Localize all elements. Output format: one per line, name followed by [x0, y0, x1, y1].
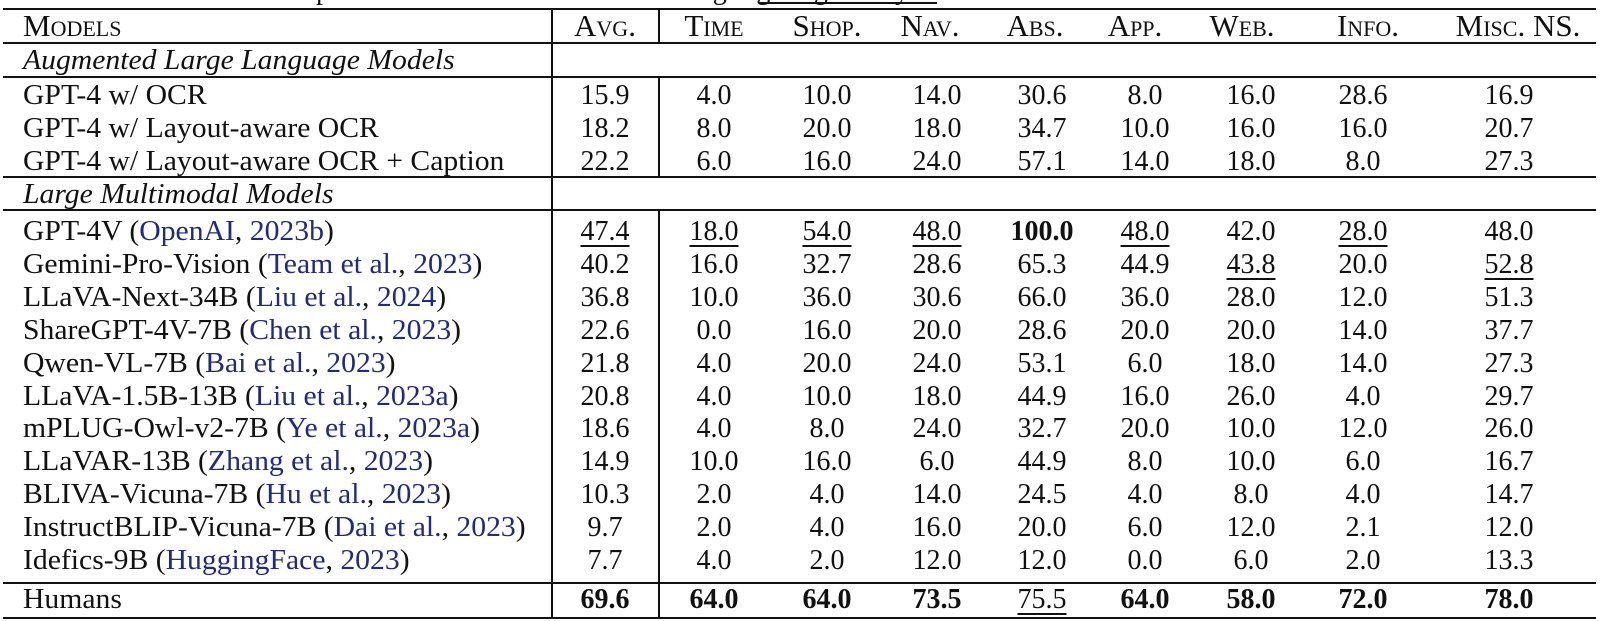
row: BLIVA-Vicuna-7B: 8.0 — [1234, 479, 1268, 510]
row: Humans: 64.0 — [690, 584, 738, 615]
row: Idefics-9B — [23, 545, 1534, 576]
row: GPT-4 w/ OCR: 16.0 — [1226, 80, 1276, 111]
header row: Time — [684, 8, 744, 43]
row: LLaVA-1.5B-13B: 26.0 — [1226, 381, 1276, 412]
row: LLaVA-Next-34B: 30.6 — [912, 282, 962, 313]
row: GPT-4 w/ Layout-aware OCR: 34.7 — [1018, 113, 1066, 144]
header row: Nav. — [900, 8, 960, 43]
header row: Models — [23, 8, 121, 43]
row: LLaVAR-13B — [23, 446, 1534, 477]
row: GPT-4 w/ Layout-aware OCR + Caption — [23, 146, 1534, 177]
row: ShareGPT-4V-7B: 37.7 — [1484, 315, 1534, 346]
row: InstructBLIP-Vicuna-7B: 12.0 — [1226, 512, 1276, 543]
row: Idefics-9B: 2.0 — [810, 545, 844, 576]
row: ShareGPT-4V-7B — [23, 315, 1534, 346]
row: BLIVA-Vicuna-7B: 14.7 — [1484, 479, 1534, 510]
row: LLaVAR-13B: 6.0 — [920, 446, 954, 477]
row: BLIVA-Vicuna-7B: 4.0 — [1346, 479, 1380, 510]
row: BLIVA-Vicuna-7B: 4.0 — [1128, 479, 1162, 510]
row: InstructBLIP-Vicuna-7B: 6.0 — [1128, 512, 1162, 543]
row: LLaVA-1.5B-13B: 44.9 — [1018, 381, 1066, 412]
row: Gemini-Pro-Vision: 20.0 — [1338, 249, 1388, 280]
row: LLaVA-Next-34B — [23, 282, 1534, 313]
row: Qwen-VL-7B: 6.0 — [1128, 348, 1162, 379]
row: Gemini-Pro-Vision: 52.8 — [1484, 249, 1534, 280]
row: BLIVA-Vicuna-7B — [23, 479, 1534, 510]
row: mPLUG-Owl-v2-7B: 20.0 — [1120, 413, 1170, 444]
row: BLIVA-Vicuna-7B: 10.3 — [580, 479, 630, 510]
header row: Abs. — [1006, 8, 1064, 43]
row: InstructBLIP-Vicuna-7B: 9.7 — [588, 512, 622, 543]
row: GPT-4V: 48.0 — [1120, 216, 1170, 247]
row: GPT-4V: 54.0 — [802, 216, 852, 247]
row: InstructBLIP-Vicuna-7B: 2.0 — [696, 512, 732, 543]
row: Idefics-9B: 4.0 — [696, 545, 732, 576]
row: GPT-4 w/ OCR: 14.0 — [912, 80, 962, 111]
row: ShareGPT-4V-7B: 14.0 — [1338, 315, 1388, 346]
row: GPT-4 w/ Layout-aware OCR + Caption: 57.1 — [1018, 146, 1066, 177]
row: Qwen-VL-7B: 53.1 — [1018, 348, 1066, 379]
row: GPT-4 w/ Layout-aware OCR: 20.0 — [802, 113, 852, 144]
row: mPLUG-Owl-v2-7B: 18.6 — [580, 413, 630, 444]
row: Gemini-Pro-Vision — [23, 249, 1534, 280]
row: BLIVA-Vicuna-7B: 4.0 — [810, 479, 844, 510]
row: LLaVA-Next-34B: 28.0 — [1226, 282, 1276, 313]
row: LLaVA-1.5B-13B — [23, 381, 1534, 412]
row: GPT-4V: 48.0 — [912, 216, 962, 247]
row: Humans: 78.0 — [1484, 584, 1534, 615]
row: GPT-4 w/ OCR: 10.0 — [802, 80, 852, 111]
row: GPT-4 w/ Layout-aware OCR + Caption: 14.0 — [1120, 146, 1170, 177]
row: GPT-4V: 47.4 — [580, 216, 630, 247]
row: BLIVA-Vicuna-7B: 24.5 — [1018, 479, 1066, 510]
row: LLaVAR-13B: 10.0 — [1226, 446, 1276, 477]
row: LLaVA-1.5B-13B: 16.0 — [1120, 381, 1170, 412]
row: mPLUG-Owl-v2-7B: 8.0 — [810, 413, 844, 444]
row: GPT-4 w/ OCR: GPT-4 w/ OCR — [23, 80, 207, 111]
row: GPT-4V: 48.0 — [1484, 216, 1534, 247]
row: GPT-4 w/ Layout-aware OCR + Caption: 8.0 — [1346, 146, 1380, 177]
row: GPT-4 w/ OCR: 15.9 — [580, 80, 630, 111]
header row: Info. — [1337, 8, 1399, 43]
row: Qwen-VL-7B: 14.0 — [1338, 348, 1388, 379]
row: mPLUG-Owl-v2-7B: 12.0 — [1338, 413, 1388, 444]
row: InstructBLIP-Vicuna-7B: InstructBLIP-Vicuna-7B (Dai et al., 2023) — [23, 512, 526, 543]
row: GPT-4 w/ Layout-aware OCR: GPT-4 w/ Layout-aware OCR — [23, 113, 379, 144]
row: BLIVA-Vicuna-7B: 2.0 — [696, 479, 732, 510]
row: GPT-4 w/ Layout-aware OCR: 10.0 — [1120, 113, 1170, 144]
row: ShareGPT-4V-7B: 28.6 — [1018, 315, 1066, 346]
row: ShareGPT-4V-7B: 20.0 — [1226, 315, 1276, 346]
row: Gemini-Pro-Vision: 28.6 — [912, 249, 962, 280]
row: LLaVA-1.5B-13B: 4.0 — [696, 381, 732, 412]
row: LLaVAR-13B: 44.9 — [1018, 446, 1066, 477]
row: ShareGPT-4V-7B: 20.0 — [912, 315, 962, 346]
row: Gemini-Pro-Vision: 16.0 — [690, 249, 738, 280]
row: Idefics-9B: Idefics-9B (HuggingFace, 2023) — [23, 545, 410, 576]
row: InstructBLIP-Vicuna-7B: 20.0 — [1018, 512, 1066, 543]
row: BLIVA-Vicuna-7B: BLIVA-Vicuna-7B (Hu et al., 2023) — [23, 479, 451, 510]
header row: Avg. — [574, 8, 636, 43]
row: LLaVAR-13B: 14.9 — [580, 446, 630, 477]
row: GPT-4 w/ Layout-aware OCR — [23, 113, 1534, 144]
row: Humans: 64.0 — [802, 584, 852, 615]
row: mPLUG-Owl-v2-7B: mPLUG-Owl-v2-7B (Ye et al., 2023a) — [23, 413, 480, 444]
row: GPT-4 w/ OCR: 28.6 — [1338, 80, 1388, 111]
row: LLaVA-Next-34B: 36.0 — [802, 282, 852, 313]
row: LLaVAR-13B: 8.0 — [1128, 446, 1162, 477]
row: GPT-4 w/ Layout-aware OCR: 16.0 — [1338, 113, 1388, 144]
row: BLIVA-Vicuna-7B: 14.0 — [912, 479, 962, 510]
row: LLaVA-Next-34B: 10.0 — [690, 282, 738, 313]
row: Qwen-VL-7B: 20.0 — [802, 348, 852, 379]
row: LLaVAR-13B: 16.0 — [802, 446, 852, 477]
row: Idefics-9B: 12.0 — [1018, 545, 1066, 576]
section heading: augmented LLMs: Augmented Large Language Models — [23, 45, 455, 76]
row: Gemini-Pro-Vision: 40.2 — [580, 249, 630, 280]
row: InstructBLIP-Vicuna-7B: 4.0 — [810, 512, 844, 543]
row: GPT-4 w/ Layout-aware OCR + Caption: 27.3 — [1484, 146, 1534, 177]
row: Humans: 75.5 — [1018, 584, 1066, 615]
row: LLaVAR-13B: LLaVAR-13B (Zhang et al., 2023) — [23, 446, 433, 477]
row: Qwen-VL-7B: 4.0 — [696, 348, 732, 379]
row: Humans: 73.5 — [912, 584, 962, 615]
row: GPT-4V: 18.0 — [690, 216, 738, 247]
row: mPLUG-Owl-v2-7B: 24.0 — [912, 413, 962, 444]
row: mPLUG-Owl-v2-7B: 4.0 — [696, 413, 732, 444]
row: mPLUG-Owl-v2-7B: 10.0 — [1226, 413, 1276, 444]
row: Gemini-Pro-Vision: 44.9 — [1120, 249, 1170, 280]
row: LLaVAR-13B: 16.7 — [1484, 446, 1534, 477]
row: Gemini-Pro-Vision: 43.8 — [1226, 249, 1276, 280]
header row: App. — [1108, 8, 1162, 43]
row: InstructBLIP-Vicuna-7B — [23, 512, 1534, 543]
row: GPT-4 w/ Layout-aware OCR + Caption: 22.2 — [580, 146, 630, 177]
row: LLaVA-1.5B-13B: 4.0 — [1346, 381, 1380, 412]
row: GPT-4 w/ OCR: 8.0 — [1128, 80, 1162, 111]
header row: Shop. — [792, 8, 862, 43]
row: LLaVA-1.5B-13B: 18.0 — [912, 381, 962, 412]
row: GPT-4 w/ Layout-aware OCR + Caption: 16.0 — [802, 146, 852, 177]
row: LLaVA-Next-34B: 51.3 — [1484, 282, 1534, 313]
row: GPT-4 w/ OCR: 4.0 — [696, 80, 732, 111]
row: GPT-4V: GPT-4V (OpenAI, 2023b) — [23, 216, 334, 247]
row: ShareGPT-4V-7B: 0.0 — [696, 315, 732, 346]
row: InstructBLIP-Vicuna-7B: 2.1 — [1346, 512, 1380, 543]
row: GPT-4V — [23, 216, 1534, 247]
row: GPT-4 w/ Layout-aware OCR + Caption: GPT-4 w/ Layout-aware OCR + Caption — [23, 146, 504, 177]
row: LLaVA-Next-34B: LLaVA-Next-34B (Liu et al., 2024) — [23, 282, 446, 313]
row: InstructBLIP-Vicuna-7B: 16.0 — [912, 512, 962, 543]
row: GPT-4 w/ Layout-aware OCR + Caption: 6.0 — [696, 146, 732, 177]
row: LLaVA-Next-34B: 66.0 — [1018, 282, 1066, 313]
row: Humans: 58.0 — [1226, 584, 1276, 615]
row: Humans: 72.0 — [1338, 584, 1388, 615]
row: ShareGPT-4V-7B: 22.6 — [580, 315, 630, 346]
row: mPLUG-Owl-v2-7B: 26.0 — [1484, 413, 1534, 444]
row: GPT-4 w/ Layout-aware OCR + Caption: 18.0 — [1226, 146, 1276, 177]
header row: Misc. NS. — [1456, 8, 1580, 43]
row: Idefics-9B: 2.0 — [1346, 545, 1380, 576]
row: Gemini-Pro-Vision: 65.3 — [1018, 249, 1066, 280]
row: Qwen-VL-7B: Qwen-VL-7B (Bai et al., 2023) — [23, 348, 396, 379]
row: Qwen-VL-7B: 21.8 — [580, 348, 630, 379]
header row — [23, 8, 1580, 43]
row: LLaVAR-13B: 10.0 — [690, 446, 738, 477]
row: LLaVA-1.5B-13B: LLaVA-1.5B-13B (Liu et al., 2023a) — [23, 381, 459, 412]
row: Humans: 69.6 — [580, 584, 630, 615]
row: Idefics-9B: 13.3 — [1484, 545, 1534, 576]
row: InstructBLIP-Vicuna-7B: 12.0 — [1484, 512, 1534, 543]
row: Idefics-9B: 7.7 — [588, 545, 622, 576]
row: GPT-4V: 42.0 — [1226, 216, 1276, 247]
row: LLaVA-Next-34B: 36.8 — [580, 282, 630, 313]
row: Humans: Humans — [23, 584, 122, 615]
row: GPT-4 w/ OCR: 16.9 — [1484, 80, 1534, 111]
row: GPT-4 w/ Layout-aware OCR: 8.0 — [696, 113, 732, 144]
row: GPT-4V: 28.0 — [1338, 216, 1388, 247]
row: LLaVAR-13B: 6.0 — [1346, 446, 1380, 477]
row: ShareGPT-4V-7B: 16.0 — [802, 315, 852, 346]
row: GPT-4 w/ OCR: 30.6 — [1018, 80, 1066, 111]
row: Gemini-Pro-Vision: Gemini-Pro-Vision (Team et al., 2023) — [23, 249, 482, 280]
row: Idefics-9B: 0.0 — [1128, 545, 1162, 576]
header row: Web. — [1209, 8, 1275, 43]
row: LLaVA-1.5B-13B: 29.7 — [1484, 381, 1534, 412]
row: LLaVA-Next-34B: 36.0 — [1120, 282, 1170, 313]
row: Qwen-VL-7B: 24.0 — [912, 348, 962, 379]
row: Qwen-VL-7B: 18.0 — [1226, 348, 1276, 379]
row: GPT-4 w/ Layout-aware OCR + Caption: 24.0 — [912, 146, 962, 177]
row: Idefics-9B: 12.0 — [912, 545, 962, 576]
row: mPLUG-Owl-v2-7B — [23, 413, 1534, 444]
row: GPT-4V: 100.0 — [1010, 216, 1074, 247]
row: GPT-4 w/ Layout-aware OCR: 20.7 — [1484, 113, 1534, 144]
row: LLaVA-1.5B-13B: 10.0 — [802, 381, 852, 412]
row: mPLUG-Owl-v2-7B: 32.7 — [1018, 413, 1066, 444]
row: GPT-4 w/ Layout-aware OCR: 18.0 — [912, 113, 962, 144]
row: Qwen-VL-7B: 27.3 — [1484, 348, 1534, 379]
clipped caption text above table — [316, 0, 937, 6]
row: GPT-4 w/ Layout-aware OCR: 16.0 — [1226, 113, 1276, 144]
row: GPT-4 w/ Layout-aware OCR: 18.2 — [580, 113, 630, 144]
row: Humans — [23, 584, 1534, 615]
row: LLaVA-1.5B-13B: 20.8 — [580, 381, 630, 412]
row: LLaVA-Next-34B: 12.0 — [1338, 282, 1388, 313]
section heading: LMMs: Large Multimodal Models — [23, 179, 334, 210]
row: Humans: 64.0 — [1120, 584, 1170, 615]
row: Qwen-VL-7B — [23, 348, 1534, 379]
row: Gemini-Pro-Vision: 32.7 — [802, 249, 852, 280]
row: Idefics-9B: 6.0 — [1234, 545, 1268, 576]
row: GPT-4 w/ OCR — [23, 80, 1534, 111]
row: ShareGPT-4V-7B: ShareGPT-4V-7B (Chen et al., 2023) — [23, 315, 461, 346]
row: ShareGPT-4V-7B: 20.0 — [1120, 315, 1170, 346]
